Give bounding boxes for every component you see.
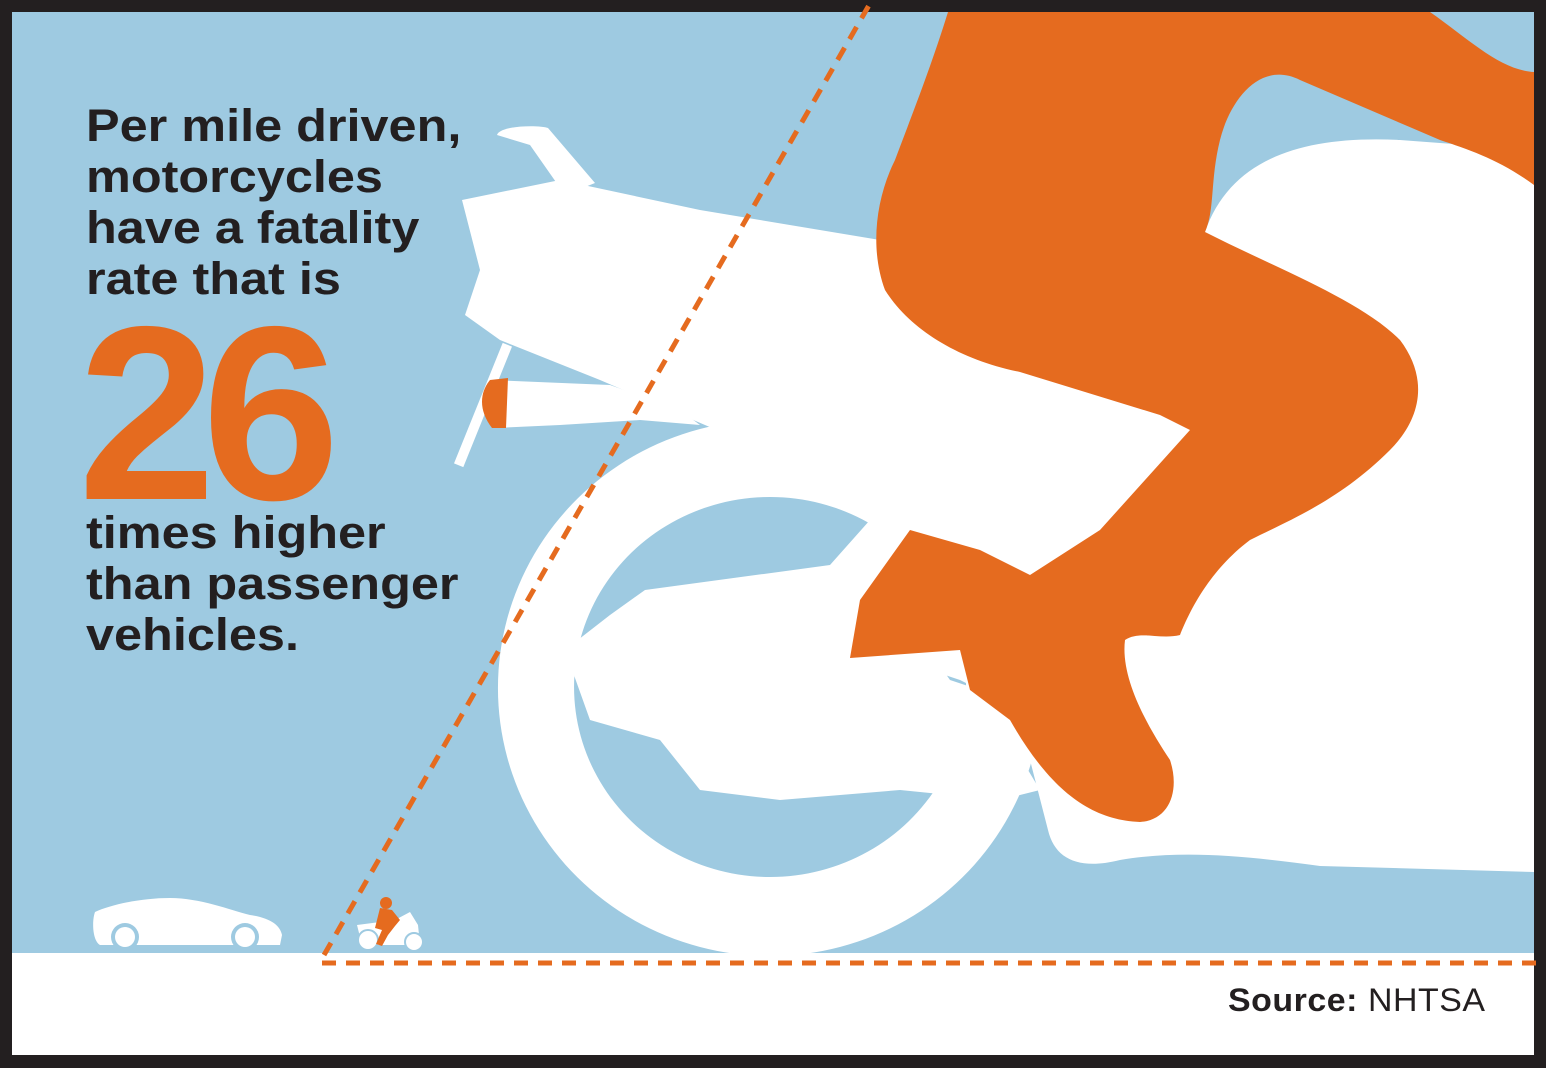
motorcycle silhouette xyxy=(454,126,1534,956)
heading text: rate that is xyxy=(86,253,341,304)
text: times higher: than passenger xyxy=(86,558,459,609)
text: times higher: times higher xyxy=(86,507,386,558)
rider orange leg xyxy=(482,12,1534,822)
heading text: have a fatality xyxy=(86,202,419,253)
icon: car xyxy=(93,898,282,951)
icon: motorcycle xyxy=(357,897,423,951)
source: Source: NHTSA xyxy=(1228,982,1486,1018)
big number 26: 26 xyxy=(78,274,326,552)
dashed line: horizontal xyxy=(322,960,1546,966)
text: times higher: vehicles. xyxy=(86,609,299,660)
white ground strip xyxy=(12,953,1534,1055)
text: times higher xyxy=(86,507,459,660)
heading text: motorcycles xyxy=(86,151,383,202)
heading text xyxy=(86,100,461,304)
heading text: Per mile driven, xyxy=(86,100,461,151)
dashed line: diagonal xyxy=(324,0,872,955)
